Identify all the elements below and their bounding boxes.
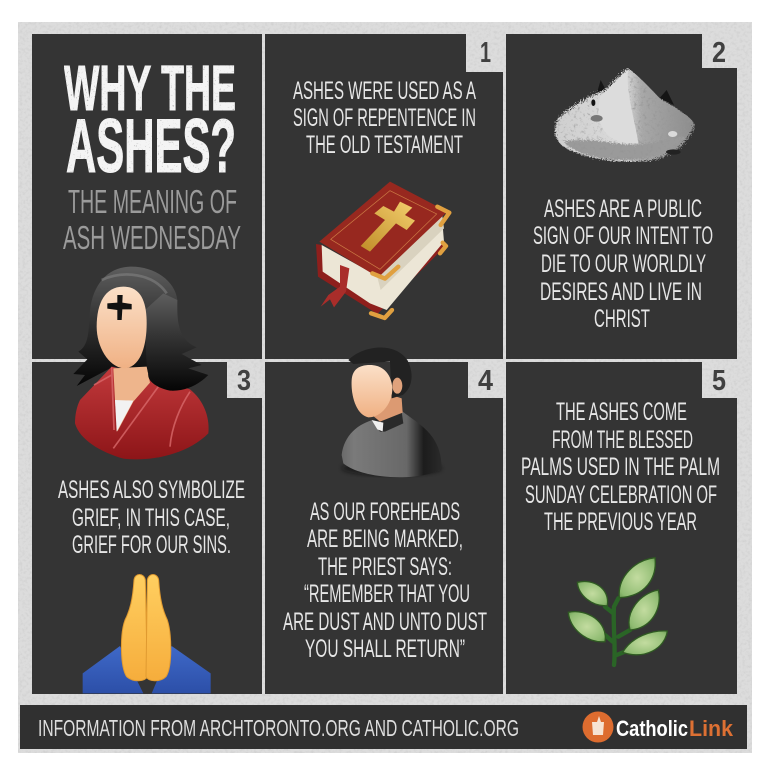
text: panel 4 [283,498,487,663]
icon: woman with ash cross [73,267,209,459]
text: panel 3: ASHES ALSO SYMBOLIZE [58,476,245,504]
logo: CatholicLink: Catholic [616,716,688,741]
number 3: 3 [237,365,251,397]
subheading [63,183,241,256]
text: panel 1: THE OLD TESTAMENT [306,131,463,159]
text: panel 2: CHRIST [594,305,650,333]
number 4: 4 [478,365,493,397]
text: panel 1: ASHES WERE USED AS A [293,77,476,105]
text: panel 5 [521,398,720,536]
footer bar [20,705,747,749]
logo: CatholicLink: Link [689,716,734,741]
panel 3 [32,362,262,694]
icon: palm leaves [568,558,667,665]
text: panel 4: “REMEMBER THAT YOU [304,580,470,608]
number 5: 5 [712,365,726,397]
text: panel 3: GRIEF FOR OUR SINS. [72,531,231,559]
panel 1 [265,34,503,359]
text: panel 4: YOU SHALL RETURN” [305,635,465,663]
number 2: 2 [712,37,726,69]
text: panel 4: AS OUR FOREHEADS [310,498,460,526]
text: panel 1: SIGN OF REPENTENCE IN [293,104,476,132]
icon: bible [316,182,449,318]
icon: priest [342,347,442,477]
icon: praying hands [83,574,211,693]
text: panel 4: THE PRIEST SAYS: [318,553,452,581]
text: panel 4: ARE DUST AND UNTO DUST [283,608,487,636]
heading: why the ashes: WHY THE [64,52,236,124]
subheading: ASH WEDNESDAY [63,219,241,256]
icon: ash pile [555,68,695,162]
logo: CatholicLink [582,712,734,742]
text: panel 3 [58,476,245,559]
text: panel 4: ARE BEING MARKED, [307,525,463,553]
number 1: 1 [480,37,491,69]
text: panel 2 [533,195,713,333]
panel 4 [265,362,503,694]
text: panel 3: GRIEF, IN THIS CASE, [72,504,230,532]
hair falling over the right shoulder [145,293,208,391]
panel: title [32,34,262,359]
subheading: THE MEANING OF [68,183,237,220]
heading: why the ashes: ASHES? [66,104,236,189]
text: panel 1 [293,77,476,159]
panel 2 [506,34,737,359]
panel 5 [506,362,737,694]
footer source text: INFORMATION FROM ARCHTORONTO.ORG AND CATHOLIC.ORG [38,715,519,741]
heading: why the ashes [64,52,236,189]
